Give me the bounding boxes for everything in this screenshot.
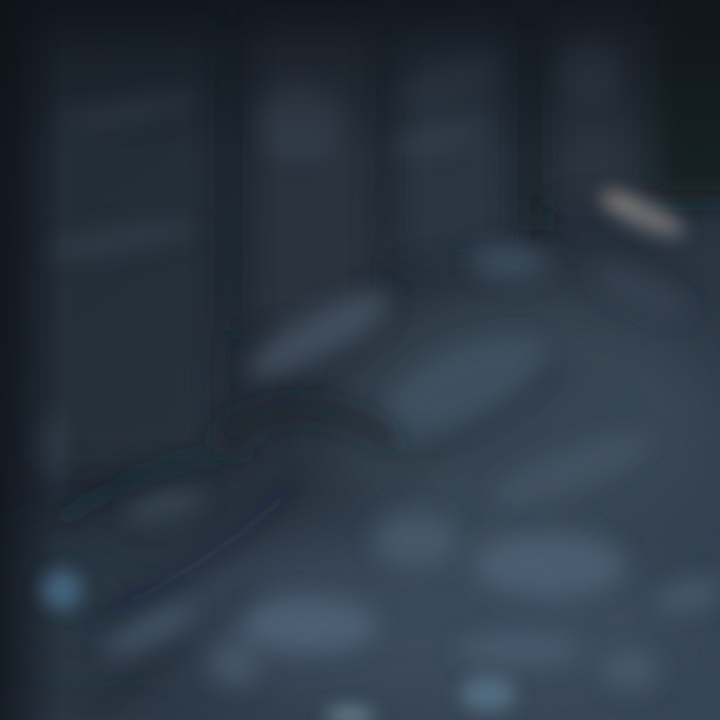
- bright blue spots along the bottom: [42, 570, 516, 720]
- dark arcs crossing the lower half: [60, 370, 560, 715]
- vertical bands in the upper half: [40, 0, 720, 460]
- bright highlight at upper right: [595, 183, 689, 245]
- wave streaks in the lower half: [98, 245, 720, 690]
- edge vignette: [0, 0, 720, 150]
- soft streaks inside the bands: [36, 40, 620, 490]
- large lighter mass at lower right: [0, 290, 720, 705]
